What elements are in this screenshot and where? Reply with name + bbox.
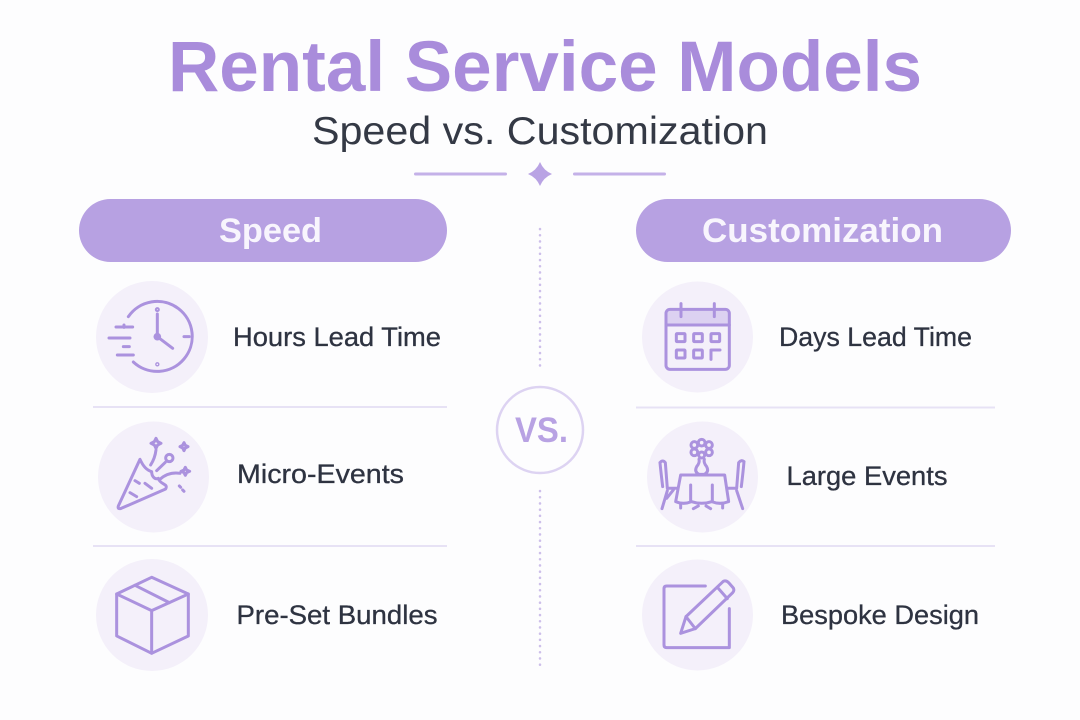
- label: Micro-Events: [237, 459, 404, 489]
- subtitle: Speed vs. Customization: [312, 110, 768, 153]
- row: micro-events: [98, 422, 404, 532]
- label: Days Lead Time: [779, 322, 972, 352]
- icon: calendar: [666, 304, 729, 369]
- title: Rental Service Models: [168, 28, 922, 107]
- icon: box: [117, 577, 188, 653]
- label: Pre-Set Bundles: [236, 600, 438, 630]
- row: days lead time: [642, 282, 972, 392]
- center dotted divider with VS badge: [497, 229, 583, 667]
- row: hours lead time: [96, 281, 441, 393]
- row: pre-set bundles: [96, 559, 438, 671]
- heading pill: Customization: Customization: [702, 212, 943, 250]
- icon: pencil on square: [664, 581, 734, 648]
- panel: customization column: [636, 199, 1011, 670]
- icon: fast clock: [109, 301, 192, 371]
- label: Bespoke Design: [781, 600, 979, 630]
- row: bespoke design: [642, 560, 979, 670]
- icon: dining table with flowers: [660, 439, 744, 509]
- heading pill: Speed: Speed: [219, 212, 322, 250]
- row: large events: [647, 422, 948, 532]
- heading pill: Customization: [636, 199, 1011, 262]
- label: Large Events: [786, 461, 948, 491]
- panel: speed column: [79, 199, 447, 671]
- vs badge: [497, 387, 583, 473]
- icon: party popper: [118, 438, 190, 509]
- heading pill: Speed: [79, 199, 447, 262]
- label: Hours Lead Time: [233, 322, 441, 352]
- vs badge: VS.: [515, 411, 568, 450]
- divider ornament with star: [414, 162, 666, 186]
